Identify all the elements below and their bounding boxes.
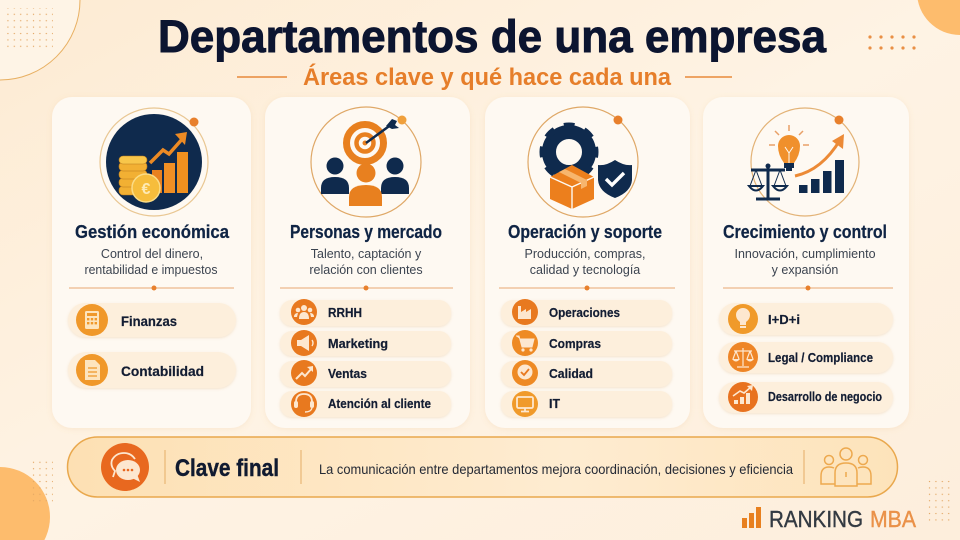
heading: Personas y mercado bbox=[290, 222, 442, 242]
item: Calidad bbox=[501, 360, 672, 387]
item: Marketing: Marketing bbox=[328, 337, 388, 351]
logo: Ranking MBA: MBA bbox=[870, 506, 917, 532]
description: relación con clientes bbox=[309, 263, 423, 277]
item: Legal / Compliance bbox=[719, 342, 893, 373]
icon: target and people bbox=[311, 107, 421, 217]
title: Departamentos de una empresa bbox=[158, 11, 827, 62]
callout: Clave final bbox=[68, 437, 898, 497]
heading: Operación y soporte bbox=[508, 222, 662, 242]
callout heading: Clave final bbox=[175, 455, 279, 482]
icon: team outline bbox=[821, 448, 871, 486]
item: Finanzas bbox=[68, 303, 236, 337]
description: y expansión bbox=[772, 263, 838, 277]
item: Marketing bbox=[280, 330, 451, 356]
item: Contabilidad bbox=[68, 352, 236, 388]
item: Desarrollo de negocio bbox=[719, 382, 893, 413]
item: I+D+i: I+D+i bbox=[768, 313, 800, 327]
logo: Ranking MBA: RANKING bbox=[769, 506, 863, 532]
item: Compras: Compras bbox=[549, 337, 601, 351]
description: Producción, compras, bbox=[525, 247, 645, 261]
description bbox=[734, 247, 876, 277]
item: IT: IT bbox=[549, 397, 560, 411]
item: I+D+i bbox=[719, 303, 893, 335]
subtitle: Áreas clave y qué hace cada una bbox=[303, 63, 672, 91]
icon: coins and rising bars bbox=[100, 108, 208, 216]
item: Operaciones: Operaciones bbox=[549, 306, 620, 320]
item: Compras bbox=[501, 330, 672, 356]
divider bbox=[499, 286, 675, 290]
icon: coins and rising bars: € bbox=[142, 181, 151, 198]
callout text: La comunicación entre departamentos mejora coordinación, decisiones y eficiencia bbox=[319, 461, 793, 477]
description bbox=[84, 247, 218, 277]
description bbox=[525, 247, 645, 277]
heading: Crecimiento y control bbox=[723, 222, 887, 242]
item: Desarrollo de negocio: Desarrollo de negocio bbox=[768, 390, 882, 404]
item: Finanzas: Finanzas bbox=[121, 313, 177, 329]
divider bbox=[280, 286, 453, 290]
description: Innovación, cumplimiento bbox=[734, 247, 876, 261]
description: Talento, captación y bbox=[311, 247, 422, 261]
icon: gear, box and shield bbox=[528, 107, 638, 217]
item: RRHH bbox=[280, 299, 451, 326]
divider bbox=[69, 286, 234, 290]
description: Control del dinero, bbox=[101, 247, 203, 261]
item: RRHH: RRHH bbox=[328, 306, 362, 320]
item: Operaciones bbox=[501, 299, 672, 326]
item: Ventas: Ventas bbox=[328, 367, 367, 381]
item: Calidad: Calidad bbox=[549, 367, 593, 381]
panel: Personas y mercado bbox=[265, 97, 470, 428]
item: Atención al cliente bbox=[280, 391, 451, 417]
description bbox=[309, 247, 423, 277]
description: calidad y tecnología bbox=[530, 263, 640, 277]
panel: Operación y soporte bbox=[485, 97, 690, 428]
item: Ventas bbox=[280, 360, 451, 387]
panel: Crecimiento y control bbox=[703, 97, 909, 428]
icon: bulb, scales and growth bbox=[749, 108, 859, 216]
icon: chat bubbles bbox=[101, 443, 149, 491]
heading: Gestión económica bbox=[75, 222, 230, 242]
panel: Gestión económica bbox=[52, 97, 251, 428]
item: Legal / Compliance: Legal / Compliance bbox=[768, 351, 873, 365]
description: rentabilidad e impuestos bbox=[84, 263, 218, 277]
item: Contabilidad: Contabilidad bbox=[121, 363, 204, 379]
item: IT bbox=[501, 391, 672, 417]
divider bbox=[723, 286, 893, 290]
logo: Ranking MBA bbox=[742, 506, 917, 532]
item: Atención al cliente: Atención al cliente bbox=[328, 397, 431, 411]
